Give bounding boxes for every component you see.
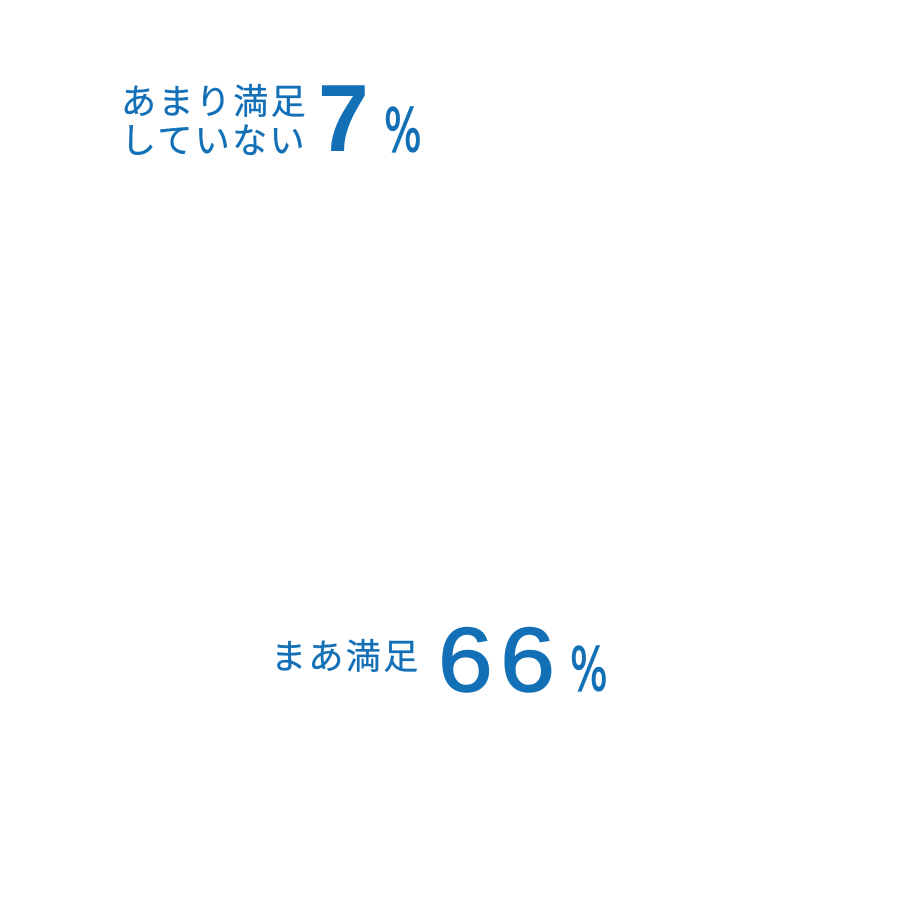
stat: fairly satisfied 66% xyxy=(271,609,608,711)
label: not very satisfied: あまり満足 xyxy=(121,83,308,122)
stat: not very satisfied 7% xyxy=(121,64,422,172)
percent sign: % xyxy=(384,96,422,165)
percent sign: % xyxy=(570,635,608,704)
value: 66: 66 xyxy=(438,609,562,711)
label: not very satisfied xyxy=(121,83,308,161)
label: fairly satisfied: まあ満足 xyxy=(271,638,421,677)
label: not very satisfied: していない xyxy=(121,122,307,161)
value: 7: 7 xyxy=(318,64,369,172)
